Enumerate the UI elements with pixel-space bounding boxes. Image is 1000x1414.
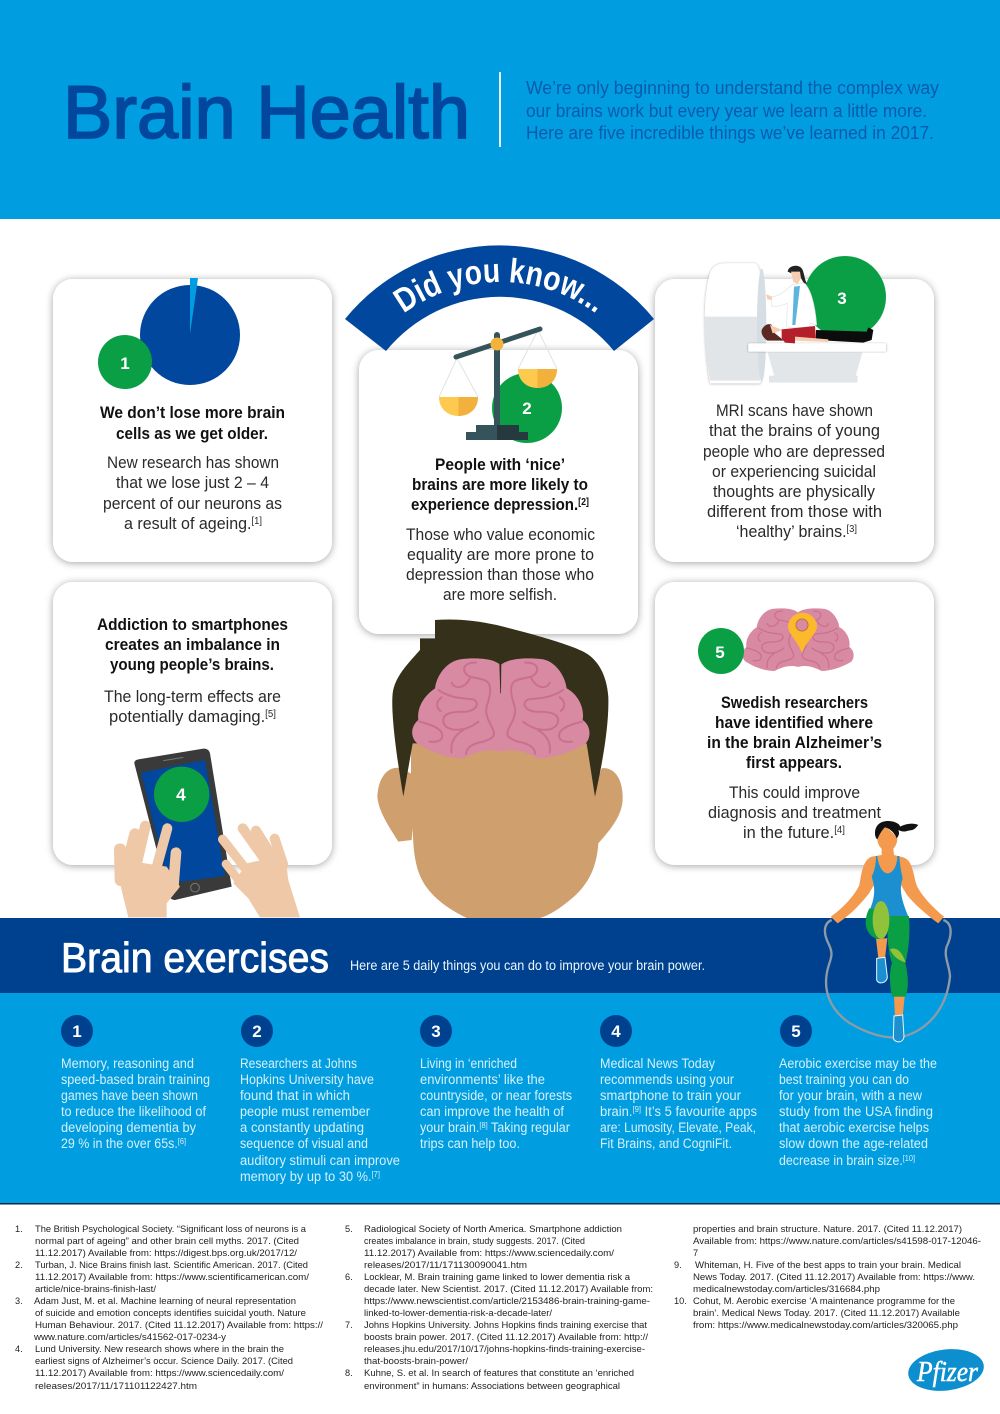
exercise 5: [10] bbox=[903, 1154, 915, 1163]
exercise 1: developing dementia by bbox=[61, 1120, 196, 1135]
exercise 2: a constantly updating bbox=[240, 1120, 364, 1135]
exercise 3: your brain. bbox=[420, 1120, 484, 1135]
exercise 5: best training you can do bbox=[779, 1072, 909, 1087]
references column 2 bbox=[345, 1224, 653, 1391]
body fact 1: a result of ageing. bbox=[124, 514, 259, 533]
exercise 2: 2 bbox=[252, 1022, 262, 1041]
heading fact 2: [2] bbox=[578, 497, 589, 508]
exercise 3: Taking regular bbox=[488, 1120, 570, 1135]
body fact 4: [5] bbox=[265, 709, 276, 720]
references column 2: Johns Hopkins University. Johns Hopkins finds training exercise that bbox=[364, 1320, 647, 1330]
references column 2: 7. bbox=[345, 1320, 353, 1330]
exercise 4: Fit Brains, and CogniFit. bbox=[600, 1136, 732, 1151]
exercise 3: countryside, or near forests bbox=[420, 1088, 572, 1103]
exercise 3: 3 bbox=[431, 1022, 441, 1041]
exercise 1: to reduce the likelihood of bbox=[61, 1104, 206, 1119]
references column 1: article/nice-brains-finish-last/ bbox=[35, 1284, 156, 1294]
text fact 3: thoughts are physically bbox=[713, 482, 875, 501]
panel: fact 1 neurons bbox=[53, 278, 332, 562]
left hand bbox=[120, 826, 180, 917]
body fact 1: that we lose just 2 – 4 bbox=[116, 473, 269, 492]
exercise 2: Researchers at Johns bbox=[240, 1056, 357, 1071]
references column 3: brain’. Medical News Today. 2017. (Cited 11.12.2017) Available bbox=[693, 1308, 960, 1318]
exercise 5: that aerobic exercise helps bbox=[779, 1120, 929, 1135]
references column 1: Human Behaviour. 2017. (Cited 11.12.2017) Available from: https:// bbox=[35, 1320, 323, 1330]
logo: Pfizer bbox=[906, 1345, 986, 1395]
exercise 2 bbox=[240, 1015, 400, 1184]
icon: brain with location pin bbox=[742, 608, 854, 671]
references column 2: Radiological Society of North America. Smartphone addiction bbox=[364, 1224, 622, 1234]
text fact 3: that the brains of young bbox=[709, 421, 880, 440]
references column 2: 6. bbox=[345, 1272, 353, 1282]
panel: fact 3 MRI bbox=[655, 256, 934, 562]
references column 1: 11.12.2017) Available from: https://digest.bps.org.uk/2017/12/ bbox=[35, 1248, 297, 1258]
references column 1: normal part of ageing” and other brain cell myths. 2017. (Cited bbox=[35, 1236, 299, 1246]
text fact 3: people who are depressed bbox=[703, 442, 885, 461]
references column 2: https://www.newscientist.com/article/2153486-brain-training-game- bbox=[364, 1296, 650, 1306]
heading fact 5 bbox=[707, 693, 882, 772]
exercise 3: Living in ‘enriched bbox=[420, 1056, 517, 1071]
intro text: We’re only beginning to understand the complex way bbox=[526, 78, 939, 98]
heading fact 4 bbox=[97, 615, 288, 674]
illustration: girl skipping bbox=[825, 821, 951, 1042]
body fact 5: [4] bbox=[834, 825, 845, 836]
exercise 1: [6] bbox=[178, 1137, 186, 1146]
subheading: exercises: Here are 5 daily things you can do to improve your brain power. bbox=[350, 958, 705, 973]
references column 3: from: https://www.medicalnewstoday.com/articles/320065.php bbox=[693, 1320, 958, 1330]
heading fact 4: young people’s brains. bbox=[110, 655, 274, 674]
references column 3: 7 bbox=[693, 1248, 698, 1258]
body fact 5 bbox=[708, 783, 881, 842]
exercise 1: speed-based brain training bbox=[61, 1072, 210, 1087]
body fact 2: Those who value economic bbox=[406, 525, 595, 544]
references column 3 bbox=[674, 1224, 981, 1330]
illustration: phone with hands bbox=[120, 749, 300, 917]
references column 2: linked-to-lower-dementia-risk-a-decade-later/ bbox=[364, 1308, 552, 1318]
exercise 5: decrease in brain size. bbox=[779, 1153, 914, 1168]
exercise 1 bbox=[61, 1015, 210, 1151]
heading fact 5: have identified where bbox=[715, 713, 873, 732]
icon: balance scale bbox=[439, 329, 557, 440]
body fact 4: potentially damaging. bbox=[109, 707, 270, 726]
exercise 2: memory by up to 30 %. bbox=[240, 1169, 379, 1184]
body fact 1: percent of our neurons as bbox=[103, 494, 282, 513]
exercise 3 bbox=[420, 1015, 572, 1151]
references column 2: Kuhne, S. et al. In search of features that constitute an ‘enriched bbox=[364, 1368, 634, 1378]
body fact 5: This could improve bbox=[729, 783, 860, 802]
body fact 1 bbox=[103, 453, 282, 533]
references column 1: Lund University. New research shows where in the brain the bbox=[35, 1344, 284, 1354]
references column 3: medicalnewstoday.com/articles/316684.php bbox=[693, 1284, 880, 1294]
number badge 5: 5 bbox=[715, 643, 725, 662]
body fact 5: diagnosis and treatment bbox=[708, 803, 881, 822]
references column 3: 10. bbox=[674, 1296, 687, 1306]
references column 2: environment” in humans: Associations between geographical bbox=[364, 1381, 620, 1391]
references column 2: releases.jhu.edu/2017/10/17/johns-hopkins-finds-training-exercise- bbox=[364, 1344, 645, 1354]
references column 2: releases/2017/11/171130090041.htm bbox=[364, 1260, 527, 1270]
heading fact 5: first appears. bbox=[746, 753, 842, 772]
illustration: head with brain bbox=[377, 619, 623, 918]
heading fact 4: Addiction to smartphones bbox=[97, 615, 288, 634]
exercise 5 bbox=[779, 1015, 937, 1168]
exercise 2: [7] bbox=[372, 1170, 380, 1179]
body fact 2 bbox=[406, 525, 595, 604]
exercise 3: environments’ like the bbox=[420, 1072, 545, 1087]
exercise 1: games have been shown bbox=[61, 1088, 198, 1103]
number badge 4: 4 bbox=[176, 784, 186, 804]
intro text: our brains work but every year we learn a little more. bbox=[526, 101, 927, 121]
references column 1 bbox=[15, 1224, 323, 1391]
band: brain exercises heading bbox=[0, 918, 1000, 993]
references column 1: Turban, J. Nice Brains finish last. Scientific American. 2017. (Cited bbox=[35, 1260, 308, 1270]
references column 2: Locklear, M. Brain training game linked to lower dementia risk a bbox=[364, 1272, 631, 1282]
text fact 3: different from those with bbox=[707, 502, 882, 521]
banner: did you know: Did you know... bbox=[392, 258, 598, 312]
number badge 3 bbox=[804, 256, 886, 338]
exercise 4: recommends using your bbox=[600, 1072, 734, 1087]
intro text: Here are five incredible things we’ve learned in 2017. bbox=[526, 123, 934, 143]
exercise 5: study from the USA finding bbox=[779, 1104, 933, 1119]
body fact 2: are more selfish. bbox=[443, 585, 557, 604]
references column 1: 11.12.2017) Available from: https://www.sciencedaily.com/ bbox=[35, 1368, 284, 1378]
number badge 2 bbox=[492, 373, 562, 443]
references column 3: News Today. 2017. (Cited 11.12.2017) Available from: https://www. bbox=[693, 1272, 975, 1282]
exercise 2: Hopkins University have bbox=[240, 1072, 374, 1087]
references column 1: 11.12.2017) Available from: https://www.scientificamerican.com/ bbox=[35, 1272, 309, 1282]
header band bbox=[0, 0, 1000, 219]
references column 1: earliest signs of Alzheimer’s occur. Science Daily. 2017. (Cited bbox=[35, 1356, 293, 1366]
number badge 3: 3 bbox=[837, 289, 847, 308]
heading: brain exercises: Brain exercises bbox=[61, 934, 329, 981]
number badge 5 bbox=[698, 628, 744, 674]
references column 2: 8. bbox=[345, 1368, 353, 1378]
body fact 4 bbox=[104, 687, 281, 726]
references column 2: that-boosts-brain-power/ bbox=[364, 1356, 468, 1366]
references column 1: Adam Just, M. et al. Machine learning of neural representation bbox=[34, 1296, 296, 1306]
exercise 2: people must remember bbox=[240, 1104, 370, 1119]
exercise 4: smartphone to train your bbox=[600, 1088, 741, 1103]
heading fact 2: experience depression. bbox=[411, 495, 600, 514]
number badge 1 bbox=[98, 335, 152, 389]
heading fact 1: cells as we get older. bbox=[116, 424, 268, 443]
heading fact 4: creates an imbalance in bbox=[105, 635, 280, 654]
body fact 1: [1] bbox=[252, 516, 262, 527]
body fact 2: equality are more prone to bbox=[407, 545, 594, 564]
references column 3: properties and brain structure. Nature. 2017. (Cited 11.12.2017) bbox=[693, 1224, 962, 1234]
body fact 4: The long-term effects are bbox=[104, 687, 281, 706]
references column 3: Cohut, M. Aerobic exercise ‘A maintenance programme for the bbox=[693, 1296, 955, 1306]
heading fact 5: Swedish researchers bbox=[721, 693, 868, 712]
body fact 2: depression than those who bbox=[406, 565, 594, 584]
references column 1: 3. bbox=[15, 1296, 23, 1306]
exercise 5: for your brain, with a new bbox=[779, 1088, 922, 1103]
references column 1: www.nature.com/articles/s41562-017-0234-y bbox=[33, 1332, 226, 1342]
exercise 3: [8] bbox=[479, 1121, 488, 1130]
exercise 4: 4 bbox=[611, 1022, 621, 1041]
references column 1: 1. bbox=[15, 1224, 23, 1234]
heading fact 5: in the brain Alzheimer’s bbox=[707, 733, 882, 752]
logo: Pfizer: Pfizer bbox=[916, 1356, 979, 1388]
panel: fact 4 smartphones bbox=[53, 582, 332, 865]
references column 3: Available from: https://www.nature.com/articles/s41598-017-12046- bbox=[693, 1236, 981, 1246]
references column 1: 2. bbox=[15, 1260, 23, 1270]
exercise 5: Aerobic exercise may be the bbox=[779, 1056, 937, 1071]
text fact 3: ‘healthy’ brains. bbox=[736, 522, 854, 541]
banner: did you know bbox=[345, 245, 654, 351]
exercise 2: sequence of visual and bbox=[240, 1136, 368, 1151]
panel: fact 5 Alzheimer's bbox=[655, 582, 934, 865]
exercise 4: are: Lumosity, Elevate, Peak, bbox=[600, 1120, 756, 1135]
exercise 2: auditory stimuli can improve bbox=[240, 1153, 400, 1168]
references column 1: releases/2017/11/171101122427.htm bbox=[35, 1381, 197, 1391]
references column 2: decade later. New Scientist. 2017. (Cited 11.12.2017) Available from: bbox=[364, 1284, 653, 1294]
exercise 1: Memory, reasoning and bbox=[61, 1056, 194, 1071]
references column 1: of suicide and emotion concepts identifies suicidal youth. Nature bbox=[35, 1308, 306, 1318]
pie chart: neurons lost bbox=[140, 278, 240, 385]
number badge 2: 2 bbox=[522, 399, 532, 418]
title: Brain Health bbox=[63, 70, 470, 154]
body fact 5: in the future. bbox=[743, 823, 838, 842]
heading fact 2: People with ‘nice’ bbox=[435, 455, 565, 474]
number badge 4 bbox=[154, 767, 209, 822]
text fact 3: [3] bbox=[847, 524, 857, 535]
exercise 4: Medical News Today bbox=[600, 1056, 715, 1071]
references column 2: 11.12.2017) Available from: https://www.sciencedaily.com/ bbox=[364, 1248, 614, 1258]
icon: MRI scanner with doctor and patient bbox=[704, 263, 886, 383]
exercise 4: brain. bbox=[600, 1104, 634, 1119]
references column 3: 9. bbox=[674, 1260, 682, 1270]
text fact 3 bbox=[703, 401, 885, 541]
exercise 5: slow down the age-related bbox=[779, 1136, 928, 1151]
exercise 5: 5 bbox=[791, 1022, 801, 1041]
exercise 2: found that in which bbox=[240, 1088, 350, 1103]
text fact 3: MRI scans have shown bbox=[716, 401, 873, 420]
references column 1: 4. bbox=[15, 1344, 23, 1354]
heading fact 1 bbox=[100, 403, 285, 443]
exercise 3: trips can help too. bbox=[420, 1136, 520, 1151]
panel: fact 2 nice brains bbox=[359, 329, 638, 634]
heading fact 2: brains are more likely to bbox=[412, 475, 588, 494]
references column 2: 5. bbox=[345, 1224, 353, 1234]
exercise 4: [9] bbox=[632, 1105, 641, 1114]
body fact 1: New research has shown bbox=[107, 453, 279, 472]
heading fact 1: We don’t lose more brain bbox=[100, 403, 285, 422]
exercise 4 bbox=[600, 1015, 757, 1151]
references column 2: creates imbalance in brain, study suggests. 2017. (Cited bbox=[364, 1236, 585, 1246]
exercise 4: It’s 5 favourite apps bbox=[641, 1104, 757, 1119]
band: exercises background bbox=[0, 993, 1000, 1203]
references column 2: boosts brain power. 2017. (Cited 11.12.2017) Available from: http:// bbox=[364, 1332, 648, 1342]
exercise 1: 29 % in the over 65s. bbox=[61, 1136, 188, 1151]
exercise 3: can improve the health of bbox=[420, 1104, 564, 1119]
right hand bbox=[223, 828, 300, 917]
references column 1: The British Psychological Society. “Significant loss of neurons is a bbox=[35, 1224, 307, 1234]
references column 3: Whiteman, H. Five of the best apps to train your brain. Medical bbox=[695, 1260, 961, 1270]
intro text bbox=[526, 78, 939, 143]
number badge 1: 1 bbox=[120, 354, 130, 373]
exercise 1: 1 bbox=[72, 1022, 82, 1041]
heading fact 2 bbox=[411, 455, 589, 514]
text fact 3: or experiencing suicidal bbox=[712, 462, 876, 481]
